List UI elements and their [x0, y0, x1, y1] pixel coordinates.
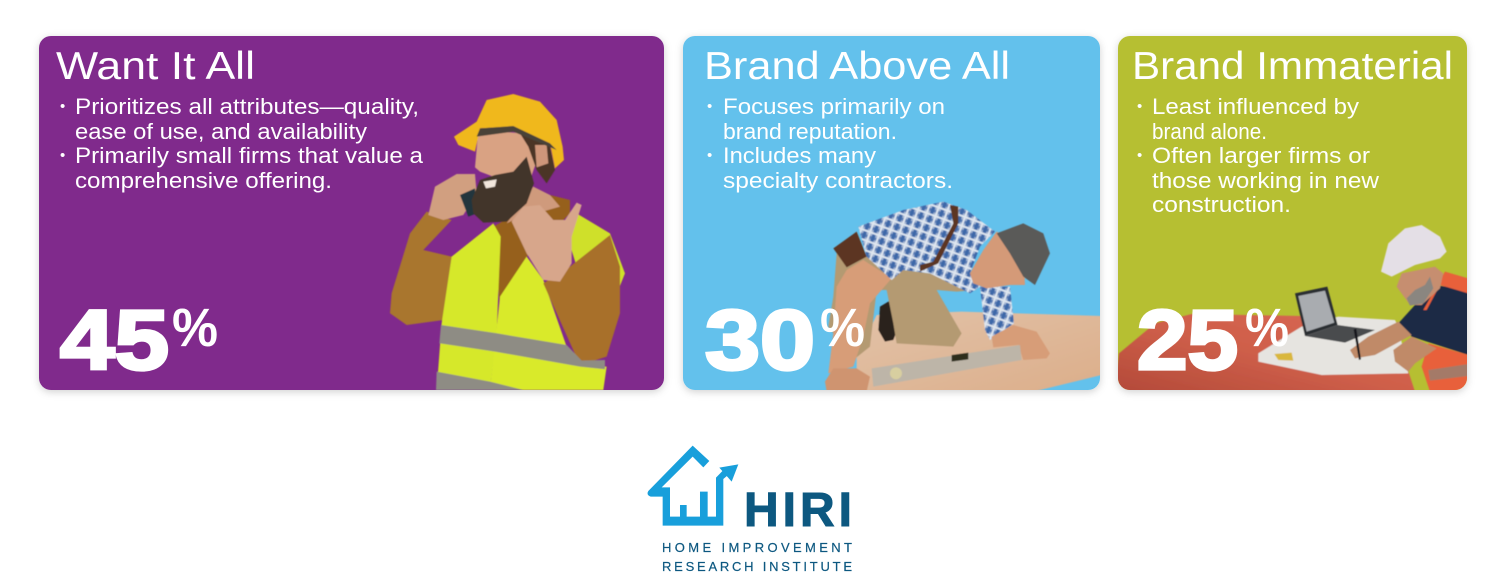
text block: Want It All bullets — [60, 94, 424, 193]
text block: Want It All bullets: comprehensive offering. — [75, 168, 332, 193]
stat: 30% — [705, 293, 865, 387]
text block: Want It All bullets: • — [60, 147, 65, 164]
photo: engineer reviewing plans with laptop — [1115, 225, 1468, 392]
text block: Brand Above All bullets: Includes many — [723, 143, 876, 168]
stat: 45%: 45 — [60, 293, 169, 387]
text block: Brand Immaterial bullets: Often larger firms or — [1152, 143, 1370, 168]
text block: Brand Above All bullets — [707, 94, 953, 193]
text block: Brand Immaterial bullets: • — [1137, 147, 1142, 164]
text block: Brand Above All bullets: brand reputation. — [723, 119, 897, 144]
text block: Brand Above All bullets: Focuses primarily on — [723, 94, 945, 119]
text block: Brand Above All bullets: specialty contractors. — [723, 168, 953, 193]
text block: Want It All bullets: Prioritizes all attributes—quality, — [75, 94, 419, 119]
panel: Brand Above All — [683, 36, 1102, 392]
heading: Brand Immaterial: Brand Immaterial — [1132, 45, 1453, 88]
logo: HIRI Home Improvement Research Institute — [648, 446, 852, 572]
stat: 45% — [60, 293, 218, 387]
photo: worker checking floor with a level — [825, 202, 1102, 392]
panel: Brand Immaterial — [1115, 36, 1468, 392]
stat: 25%: 25 — [1137, 293, 1238, 387]
stat: 30%: % — [820, 298, 865, 358]
text block: Brand Immaterial bullets: construction. — [1152, 192, 1291, 217]
text block: Want It All bullets: • — [60, 98, 65, 115]
text block: Brand Immaterial bullets — [1137, 94, 1379, 217]
wordmark: HIRI: HIRI — [744, 484, 852, 537]
text block: Brand Immaterial bullets: Least influenced by — [1152, 94, 1359, 119]
heading: Brand Above All: Brand Above All — [704, 45, 1010, 88]
panel: Want It All — [39, 36, 664, 390]
heading: Want It All: Want It All — [56, 45, 255, 88]
photo: worker in hard hat on phone — [390, 94, 625, 390]
stat: 25%: % — [1245, 298, 1289, 358]
text block: Brand Immaterial bullets: those working in new — [1152, 168, 1379, 193]
tagline — [662, 540, 852, 572]
text block: Brand Immaterial bullets: brand alone. — [1152, 119, 1267, 144]
stat: 30%: 30 — [705, 293, 815, 387]
stat: 45%: % — [172, 298, 218, 358]
stat: 25% — [1137, 293, 1289, 387]
tagline: HOME IMPROVEMENT — [662, 540, 852, 555]
icon: house with rising bars and arrow — [648, 446, 738, 526]
text block: Want It All bullets: ease of use, and availability — [75, 119, 367, 144]
text block: Want It All bullets: Primarily small firms that value a — [75, 143, 424, 168]
text block: Brand Above All bullets: • — [707, 147, 712, 164]
text block: Brand Above All bullets: • — [707, 98, 712, 115]
text block: Brand Immaterial bullets: • — [1137, 98, 1142, 115]
